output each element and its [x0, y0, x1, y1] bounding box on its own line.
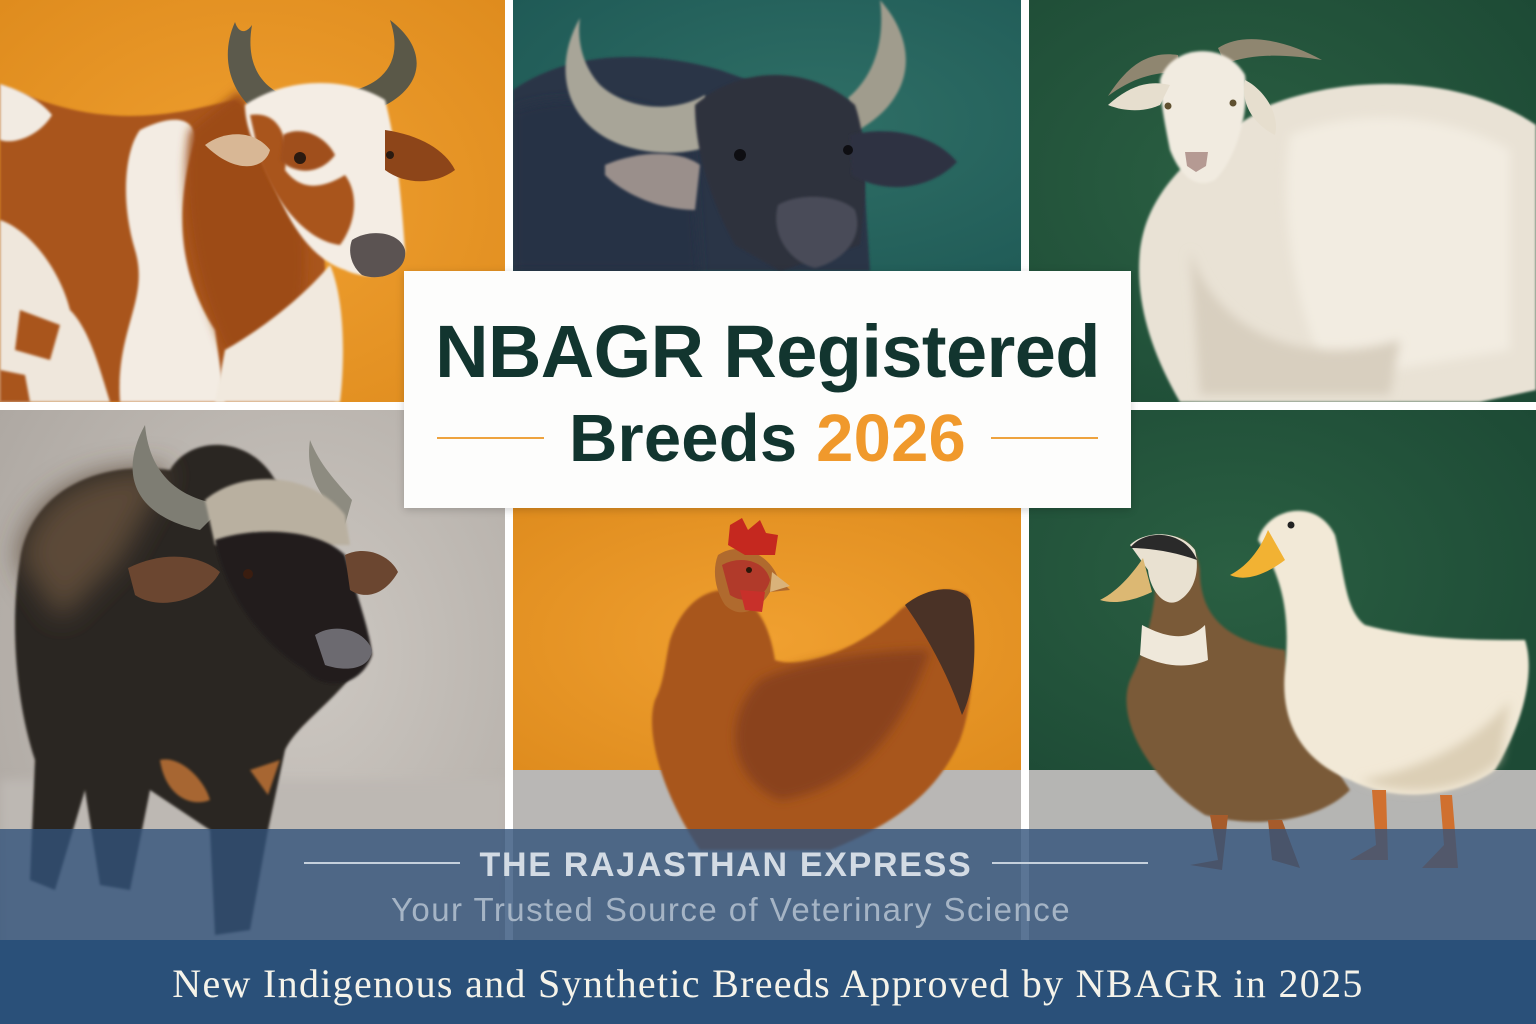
icon: gayal — [15, 425, 398, 935]
icon: goat — [1108, 39, 1536, 402]
banner: The Rajasthan Express — [0, 829, 1536, 940]
panel: buffalo on teal background — [513, 0, 1021, 271]
panel: cow on orange background — [0, 0, 505, 402]
footer text: New Indigenous and Synthetic Breeds Approved by NBAGR in 2025 — [172, 961, 1364, 1006]
footer banner — [0, 940, 1536, 1024]
title panel — [404, 271, 1131, 508]
panel: hen on orange background — [513, 508, 1021, 940]
panel: gayal on grey background — [0, 410, 505, 940]
icon: cow — [0, 20, 455, 402]
icon: brown duck — [1100, 534, 1350, 870]
icon: hen — [652, 518, 974, 850]
tagline: Your Trusted Source of Veterinary Science — [391, 891, 1071, 928]
panel: goat on green background — [1029, 0, 1536, 402]
brand name: THE RAJASTHAN EXPRESS — [480, 846, 972, 884]
heading: NBAGR Registered: NBAGR Registered — [435, 310, 1100, 393]
icon: buffalo — [513, 0, 957, 271]
icon: white duck — [1230, 511, 1529, 868]
heading: Breeds 2026: Breeds 2026 — [569, 401, 966, 476]
panel: ducks on green background — [1029, 410, 1536, 940]
